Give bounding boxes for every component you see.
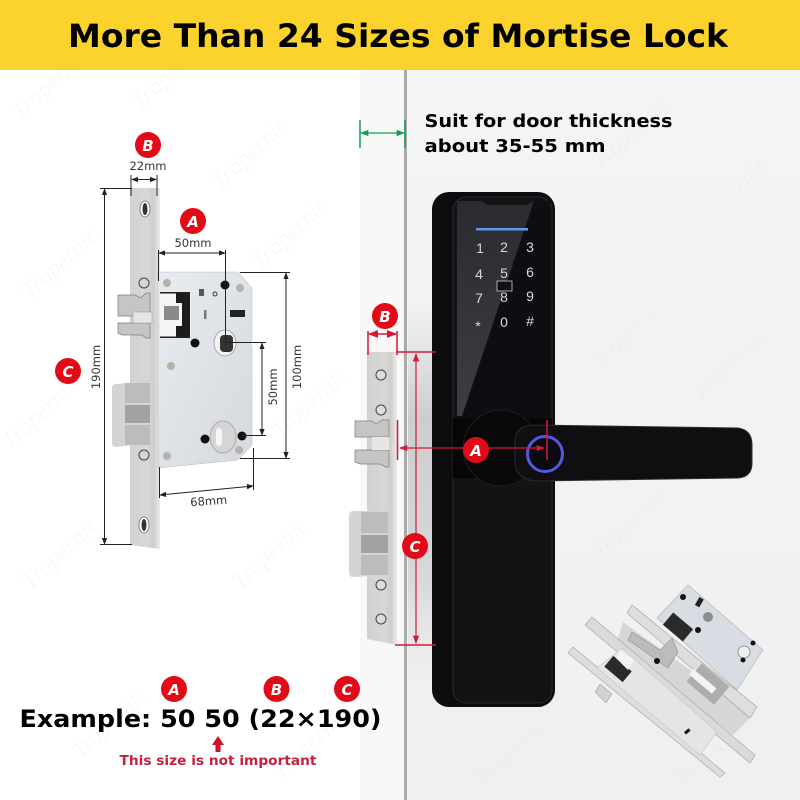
watermark: Tropernic — [67, 682, 154, 764]
watermark: Tropernic — [267, 702, 354, 784]
up arrow — [212, 736, 224, 752]
badge A left: A — [186, 213, 199, 231]
watermark: Tropernic — [267, 362, 354, 444]
watermark: Tropernic — [7, 42, 94, 124]
faceplate — [130, 188, 160, 549]
keypad: 3 — [526, 239, 534, 255]
badge A left — [180, 208, 206, 234]
dimension: C 190mm — [89, 188, 132, 544]
watermark: Tropernic — [587, 92, 674, 174]
dimension: inner 50mm: 50mm — [266, 368, 280, 406]
keypad: 2 — [500, 239, 508, 255]
glass panel — [457, 201, 550, 418]
dimension: 100mm: 100mm — [290, 345, 304, 389]
keypad: 9 — [526, 288, 534, 304]
badge C right: C — [409, 538, 421, 556]
badge B right — [372, 303, 398, 329]
badge B bottom — [264, 676, 290, 702]
smart door lock — [432, 192, 752, 707]
dimension: 68mm — [160, 448, 254, 509]
rear dead bolt — [686, 663, 730, 705]
example line: Example: 50 50 (22×190) — [20, 705, 382, 733]
front latch window — [604, 656, 632, 682]
badge C bottom: C — [341, 681, 353, 699]
latch bolt — [118, 293, 152, 338]
left mortise lock diagram — [89, 159, 304, 549]
badge B right: B — [379, 308, 391, 326]
keypad: 1 — [476, 240, 484, 256]
door thickness text — [424, 111, 672, 157]
watermark: Tropernic — [667, 712, 754, 794]
holes and screws — [139, 201, 246, 533]
lock body — [432, 192, 555, 707]
door thickness text: Suit for door thickness — [424, 111, 672, 132]
dimension: C 190mm: 190mm — [89, 345, 103, 389]
watermark: Tropernic — [467, 712, 554, 794]
title banner: More Than 24 Sizes of Mortise Lock — [68, 17, 729, 55]
dimension: 68mm: 68mm — [190, 493, 228, 509]
rear latch — [628, 632, 678, 668]
title banner — [0, 0, 800, 70]
dimension: A 50mm — [158, 236, 226, 345]
dead bolt — [112, 381, 150, 447]
door thickness text: about 35-55 mm — [424, 136, 606, 157]
red dimension A — [398, 420, 547, 460]
keypad: # — [526, 313, 534, 329]
badge A right: A — [469, 442, 482, 460]
handle — [515, 425, 752, 481]
dimension: 100mm — [240, 272, 304, 458]
lock case — [158, 272, 252, 468]
watermark: Tropernic — [247, 192, 334, 274]
keypad: 0 — [500, 314, 508, 330]
keypad: 5 — [500, 265, 508, 281]
watermark: Tropernic — [587, 292, 674, 374]
keypad: * — [475, 318, 481, 334]
dimension: B 22mm: 22mm — [129, 159, 167, 173]
watermark: Tropernic — [587, 482, 674, 564]
mortise lock in door — [349, 352, 397, 645]
rear body — [617, 622, 753, 735]
latch mechanism window — [160, 292, 191, 338]
note text: This size is not important — [120, 754, 316, 769]
rear case — [657, 585, 763, 690]
badge C left: C — [62, 363, 74, 381]
keypad: 8 — [500, 289, 508, 305]
watermark: Tropernic — [207, 112, 294, 194]
front latch — [616, 650, 634, 670]
watermark: Tropernic — [227, 512, 314, 594]
keypad: 6 — [526, 264, 534, 280]
knob rosette — [463, 410, 539, 486]
indicator bar — [476, 228, 528, 230]
watermark: Tropernic — [687, 322, 774, 404]
dimension: A 50mm: 50mm — [174, 236, 212, 250]
badge C right — [402, 533, 428, 559]
watermark: Tropernic — [17, 222, 104, 304]
watermark: Tropernic — [17, 512, 104, 594]
knob panel — [453, 418, 552, 478]
keypad: 4 — [475, 266, 483, 282]
badge A bottom: A — [167, 681, 180, 699]
fingerprint ring — [528, 436, 562, 472]
dimension: inner 50mm — [225, 342, 280, 436]
badge A right — [463, 437, 489, 463]
badge A bottom — [161, 676, 187, 702]
badge B bottom: B — [271, 681, 282, 699]
badge C left — [55, 358, 81, 384]
front body — [597, 648, 717, 755]
mortise lock set photo — [568, 585, 763, 777]
badge C bottom — [334, 676, 360, 702]
watermark: Tropernic — [687, 152, 774, 234]
badge B left — [135, 132, 161, 158]
dimension: B 22mm — [129, 159, 167, 196]
green door thickness arrow — [360, 120, 405, 148]
keypad: 7 — [475, 290, 483, 306]
watermark: Tropernic — [127, 32, 214, 114]
red dimension B — [368, 331, 397, 355]
middle faceplate — [585, 617, 755, 763]
rear faceplate — [627, 605, 757, 718]
keypad — [475, 239, 534, 334]
red dimension C — [395, 352, 436, 645]
badge B left: B — [142, 137, 154, 155]
front faceplate — [568, 647, 725, 777]
